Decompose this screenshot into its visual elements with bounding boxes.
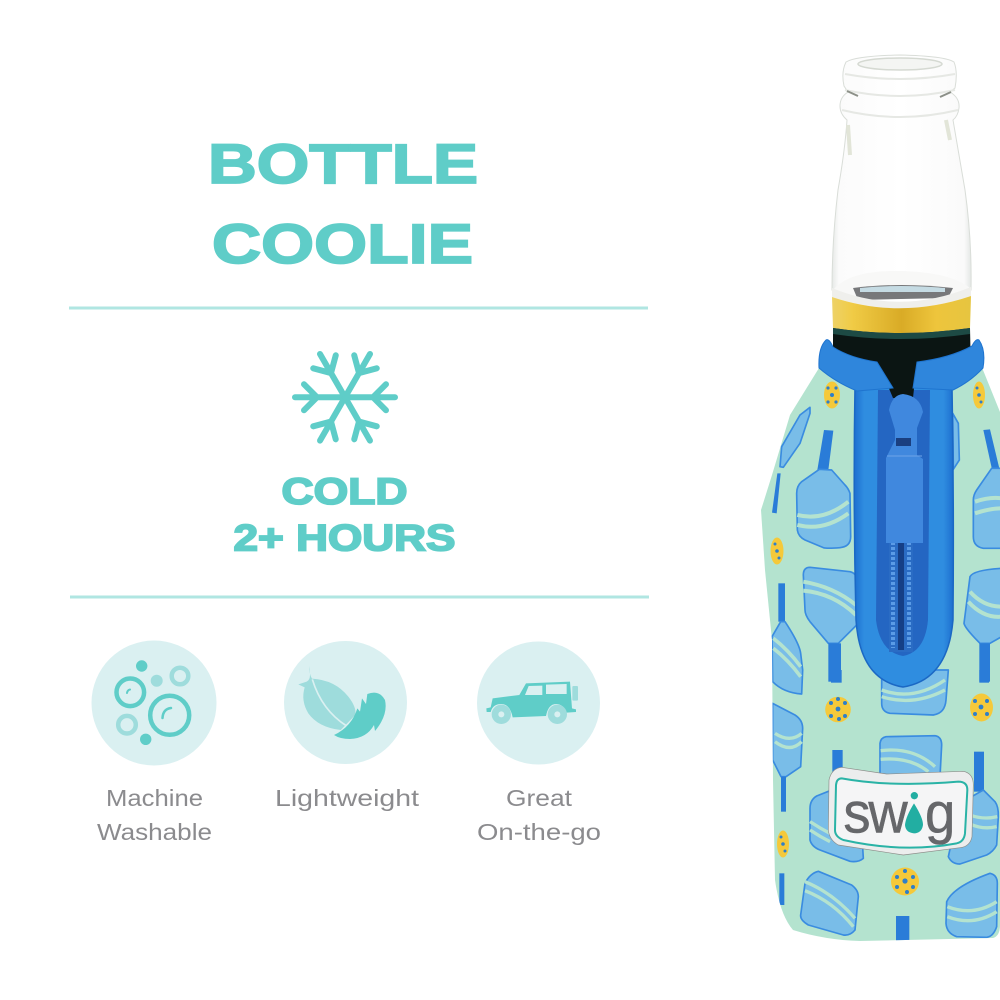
bottle sleeve — [761, 346, 1000, 943]
collar — [819, 340, 984, 391]
zipper opening — [854, 360, 953, 687]
icon: machine washable bubbles — [92, 640, 216, 766]
pickleballs — [770, 382, 993, 896]
label: great on-the-go — [477, 785, 601, 845]
icon: snowflake — [295, 347, 395, 447]
logo drop — [905, 792, 923, 833]
icon: jeep — [477, 642, 600, 764]
label: machine washable: Washable — [97, 819, 212, 845]
beer foam — [833, 271, 971, 296]
pattern: lower region — [773, 670, 998, 943]
label: lightweight: Lightweight — [275, 785, 420, 811]
glass bottle — [832, 55, 971, 372]
pattern: upper region — [772, 407, 1000, 694]
cold duration text: 2+ HOURS — [234, 518, 456, 558]
logo wordmark: swig — [843, 780, 955, 845]
icon: lightweight feather — [284, 641, 407, 764]
label: machine washable — [97, 785, 212, 845]
title: COOLIE — [212, 212, 473, 275]
cold duration text: COLD — [282, 471, 408, 512]
beer liquid — [832, 296, 971, 333]
bottle neck glass — [832, 55, 971, 290]
title — [208, 132, 478, 275]
label: great on-the-go: Great — [506, 785, 573, 811]
cold duration text — [234, 471, 456, 558]
label: great on-the-go: On-the-go — [477, 819, 601, 845]
label: machine washable: Machine — [106, 785, 203, 811]
zipper pull — [886, 394, 923, 543]
title: BOTTLE — [208, 132, 478, 195]
sleeve logo patch — [828, 767, 973, 855]
